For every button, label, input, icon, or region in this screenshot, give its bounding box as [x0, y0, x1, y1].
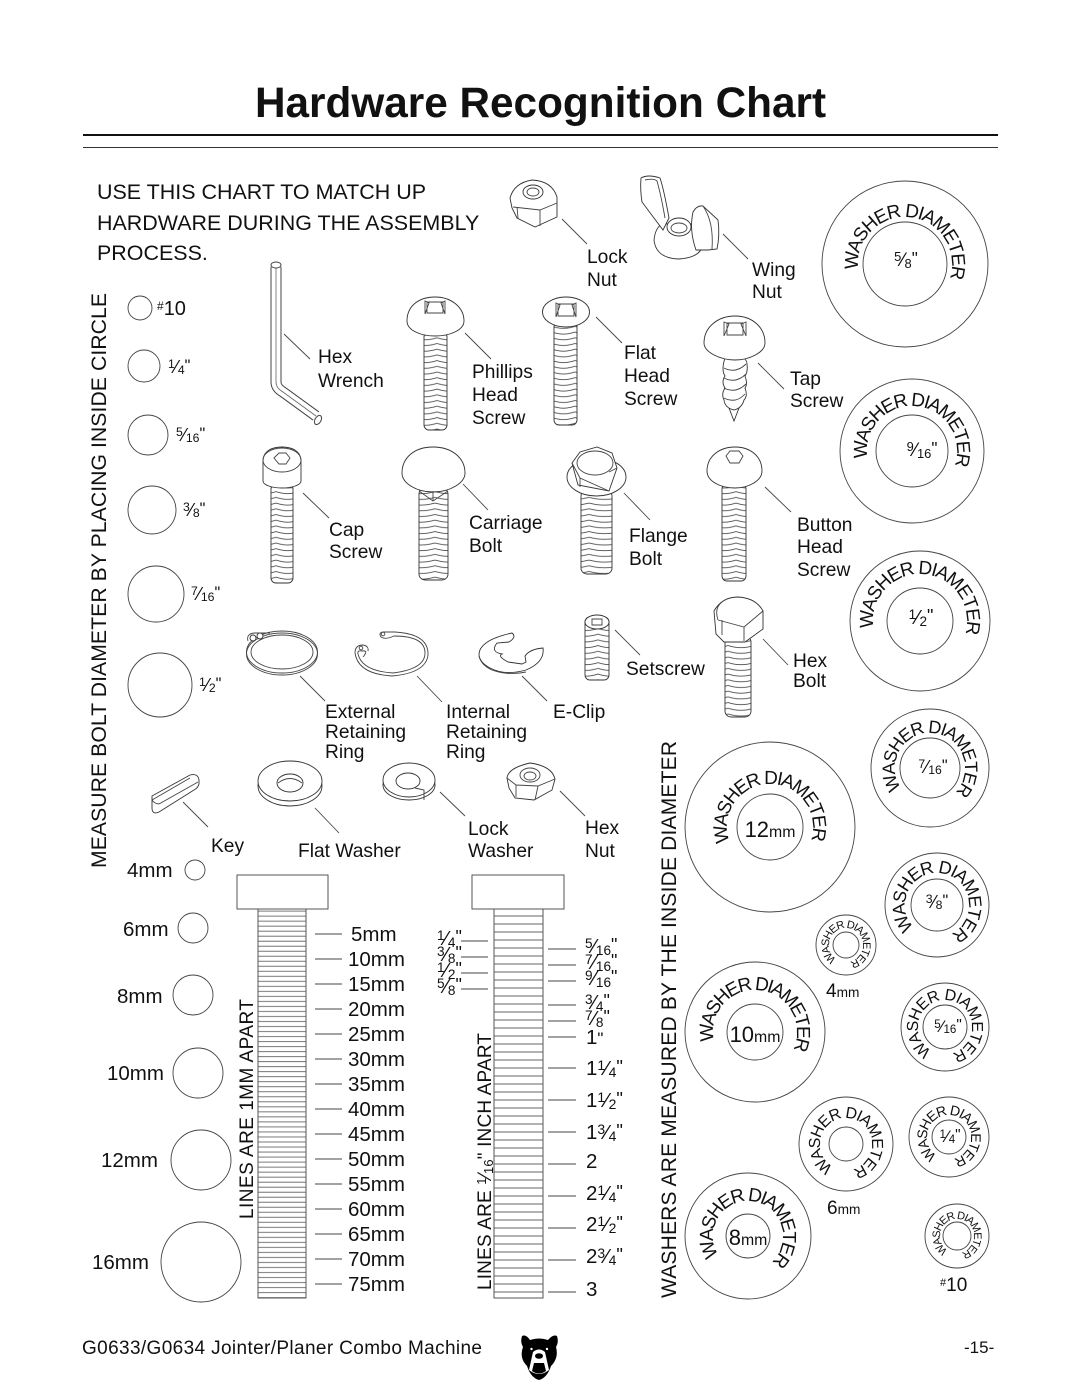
washer 5/8: WASHER DIAMETER	[844, 204, 966, 279]
e-clip	[479, 633, 605, 723]
footer: model name: G0633/G0634 Jointer/Planer Combo Machine	[82, 1338, 482, 1359]
leader line	[615, 630, 640, 655]
icon: cap screw	[263, 447, 301, 583]
left fraction labels: 1⁄2"	[437, 959, 462, 982]
phillips head screw	[407, 297, 533, 430]
label: Nut	[587, 270, 618, 291]
icon: lock nut	[510, 180, 557, 227]
label: Head	[624, 366, 670, 387]
washer 1/4: 1⁄4"	[939, 1127, 961, 1146]
washer 5/8	[822, 180, 988, 348]
bolt shank with 1mm lines	[258, 909, 306, 1298]
icon: key	[152, 775, 199, 813]
length labels: 75mm	[348, 1273, 405, 1296]
washer 1/2: WASHER DIAMETER	[860, 560, 980, 634]
length labels: 45mm	[348, 1123, 405, 1146]
right whole and mixed labels: 13⁄4"	[586, 1120, 623, 1144]
gauge 7/16: 7⁄16"	[191, 584, 220, 604]
label: Internal	[446, 702, 510, 723]
panel: metric bolt gauge circles	[92, 859, 241, 1302]
label: Key	[211, 836, 244, 857]
label: Flange	[629, 526, 688, 547]
leader line	[303, 493, 329, 518]
label: Phillips	[472, 362, 533, 383]
label: E-Clip	[553, 702, 605, 723]
gauge 1/2: 1⁄2"	[199, 675, 222, 695]
vertical label: LINES ARE 1⁄16" INCH APART	[474, 1033, 496, 1290]
washer 10mm: 10mm	[730, 1022, 780, 1047]
icon: hex bolt	[714, 597, 763, 717]
bolt shank with 1/16 inch lines	[494, 909, 543, 1298]
instructions text block: PROCESS.	[97, 241, 208, 265]
label: Bolt	[793, 671, 827, 692]
gauge 4mm	[127, 859, 205, 882]
label: Hex	[585, 818, 620, 839]
gauge 10mm: 10mm	[107, 1062, 164, 1085]
leader line	[522, 676, 547, 701]
instructions text block	[97, 180, 479, 265]
right fraction labels: 3⁄4"	[585, 991, 610, 1014]
label: Bolt	[469, 536, 503, 557]
leader line	[562, 219, 587, 244]
gauge 16mm	[92, 1222, 241, 1302]
label: Nut	[752, 282, 783, 303]
label	[325, 702, 406, 763]
length labels: 35mm	[348, 1073, 405, 1096]
label	[587, 247, 628, 291]
flange bolt	[567, 447, 688, 574]
tick marks	[461, 941, 576, 1292]
right whole and mixed labels: 11⁄4"	[586, 1056, 623, 1080]
right whole and mixed labels: 3	[586, 1278, 597, 1301]
washer 7/16: 7⁄16"	[918, 757, 948, 777]
label: Flat	[624, 343, 657, 364]
leader line	[758, 363, 784, 389]
length labels: 60mm	[348, 1198, 405, 1221]
right fraction labels: 7⁄8"	[585, 1007, 610, 1030]
icon: bear logo	[521, 1336, 558, 1380]
label	[329, 520, 382, 563]
label	[797, 515, 852, 581]
gauge 4mm: 4mm	[127, 859, 173, 882]
label	[318, 347, 384, 392]
icon: phillips screw	[407, 297, 464, 430]
washer 8mm	[684, 1172, 812, 1300]
icon: carriage bolt	[402, 447, 465, 580]
leader line	[440, 792, 465, 816]
left fraction labels: 3⁄8"	[437, 943, 462, 966]
washer 10mm: WASHER DIAMETER	[700, 976, 810, 1052]
cap screw	[263, 447, 382, 583]
length labels: 40mm	[348, 1098, 405, 1121]
length labels: 50mm	[348, 1148, 405, 1171]
button head screw	[707, 447, 852, 581]
panel: inch bolt gauge circles	[128, 296, 222, 717]
icon: flat head screw	[542, 297, 590, 425]
label	[624, 343, 677, 410]
hex wrench	[271, 262, 384, 426]
icon: hex wrench	[271, 262, 323, 426]
gauge 6mm: 6mm	[123, 918, 169, 941]
washer 6mm: 6mm	[827, 1198, 860, 1219]
label: Carriage	[469, 513, 543, 534]
label	[468, 819, 534, 862]
gauge 3/8	[128, 486, 206, 534]
label: Hex	[793, 651, 828, 672]
washer 5/16: 5⁄16"	[934, 1017, 962, 1036]
length labels: 55mm	[348, 1173, 405, 1196]
instructions text block: USE THIS CHART TO MATCH UP	[97, 180, 426, 204]
label	[585, 818, 620, 862]
gauge 5/16: 5⁄16"	[176, 425, 205, 445]
label: Head	[472, 385, 518, 406]
washer 5/8: 5⁄8"	[894, 249, 918, 271]
label: External	[325, 702, 395, 723]
washer 7/16	[870, 708, 990, 828]
instructions text block: HARDWARE DURING THE ASSEMBLY	[97, 211, 479, 235]
washer 9/16: 9⁄16"	[907, 439, 937, 461]
washer 8mm: WASHER DIAMETER	[700, 1188, 796, 1268]
leader line	[765, 487, 791, 512]
right whole and mixed labels	[586, 1026, 623, 1301]
right fraction labels	[585, 935, 617, 1030]
leader line	[560, 791, 585, 816]
vertical heading: washers: WASHERS ARE MEASURED BY THE INSIDE DIAMETER	[658, 741, 681, 1298]
gauge 3/8: 3⁄8"	[183, 500, 206, 520]
icon: tap screw	[704, 316, 765, 421]
label: Screw	[624, 389, 677, 410]
leader line	[463, 484, 488, 510]
label: Screw	[329, 542, 382, 563]
label	[472, 362, 533, 429]
washer #10: WASHER DIAMETER	[932, 1211, 982, 1258]
label: Lock	[468, 819, 509, 840]
length labels	[348, 923, 405, 1296]
washer 5/16: WASHER DIAMETER	[906, 988, 983, 1062]
washer 12mm: 12mm	[745, 817, 795, 842]
length labels: 65mm	[348, 1223, 405, 1246]
title: Hardware Recognition Chart	[255, 79, 826, 126]
label: Hex	[318, 347, 353, 368]
gauge 6mm	[123, 913, 208, 943]
label	[793, 651, 828, 692]
washer #10	[924, 1204, 990, 1296]
label	[629, 526, 688, 570]
external retaining ring	[246, 631, 406, 763]
icon: e-clip	[479, 633, 543, 674]
gauge 5/16	[128, 415, 205, 455]
washer 1/2: 1⁄2"	[909, 606, 933, 629]
gauge 7/16	[128, 566, 220, 622]
key	[152, 775, 244, 857]
panel: metric length bolt gauge	[237, 875, 405, 1298]
right whole and mixed labels: 1"	[586, 1026, 603, 1049]
label	[446, 702, 527, 763]
washer 10mm	[684, 962, 826, 1102]
label: Retaining	[325, 722, 406, 743]
label: Setscrew	[626, 659, 705, 680]
length labels: 25mm	[348, 1023, 405, 1046]
washer 6mm	[798, 1096, 894, 1219]
lock nut	[510, 180, 628, 291]
leader line	[465, 333, 491, 359]
icon: setscrew	[585, 615, 609, 680]
label: Washer	[468, 841, 534, 862]
washer 8mm: 8mm	[729, 1225, 767, 1250]
washer 4mm: 4mm	[826, 981, 859, 1002]
right whole and mixed labels: 21⁄2"	[586, 1212, 623, 1236]
washer 6mm: WASHER DIAMETER	[808, 1106, 884, 1178]
gauge 8mm: 8mm	[117, 985, 163, 1008]
tick marks	[315, 934, 342, 1284]
gauge 8mm	[117, 975, 213, 1015]
label: Screw	[472, 408, 525, 429]
right fraction labels: 7⁄16"	[585, 951, 617, 974]
washer 4mm	[816, 914, 876, 1002]
left fraction labels: 1⁄4"	[437, 927, 462, 950]
leader line	[417, 676, 442, 702]
right whole and mixed labels: 11⁄2"	[586, 1088, 623, 1112]
vertical heading: measure bolt diameter: MEASURE BOLT DIAMETER BY PLACING INSIDE CIRCLE	[88, 293, 111, 868]
length labels: 30mm	[348, 1048, 405, 1071]
wing nut	[641, 176, 796, 303]
label: Ring	[325, 742, 364, 763]
left fraction labels: 5⁄8"	[437, 975, 462, 998]
icon: flat washer	[258, 761, 322, 806]
label: Cap	[329, 520, 364, 541]
washer 3/8: WASHER DIAMETER	[892, 860, 982, 942]
label: Lock	[587, 247, 628, 268]
label: Wing	[752, 260, 796, 281]
gauge #10: #10	[157, 298, 186, 320]
length labels: 5mm	[351, 923, 397, 946]
footer: page number: -15-	[964, 1338, 994, 1357]
leader line	[284, 334, 310, 359]
leader line	[723, 234, 748, 259]
washer 3/8: 3⁄8"	[926, 892, 948, 912]
icon: wing nut	[641, 176, 719, 259]
washer 1/4: WASHER DIAMETER	[917, 1105, 981, 1166]
leader line	[300, 676, 325, 701]
right whole and mixed labels: 23⁄4"	[586, 1244, 623, 1268]
washer 9/16: WASHER DIAMETER	[854, 392, 970, 466]
internal retaining ring	[355, 632, 527, 763]
lock washer	[383, 763, 534, 862]
setscrew	[585, 615, 705, 680]
label: Screw	[790, 391, 843, 412]
hex bolt	[714, 597, 828, 717]
icon: button head screw	[707, 447, 762, 581]
label: Button	[797, 515, 852, 536]
gauge 16mm: 16mm	[92, 1251, 149, 1274]
gauge #10	[128, 296, 186, 320]
label	[752, 260, 796, 303]
panel: inch length bolt gauge	[437, 875, 623, 1301]
bolt head	[472, 875, 564, 909]
washer 7/16: WASHER DIAMETER	[882, 720, 978, 797]
washer #10: #10	[940, 1275, 967, 1296]
label: Wrench	[318, 371, 384, 392]
label: Ring	[446, 742, 485, 763]
right fraction labels: 5⁄16"	[585, 935, 617, 958]
label: Retaining	[446, 722, 527, 743]
leader line	[596, 317, 622, 343]
right whole and mixed labels: 2	[586, 1150, 597, 1173]
bolt head	[237, 875, 328, 909]
gauge 12mm: 12mm	[101, 1149, 158, 1172]
label	[790, 369, 843, 412]
icon: flange bolt	[567, 447, 626, 574]
icon: lock washer	[383, 763, 435, 800]
label: Tap	[790, 369, 821, 390]
right whole and mixed labels: 21⁄4"	[586, 1181, 623, 1205]
icon: external ring	[246, 631, 318, 675]
length labels: 20mm	[348, 998, 405, 1021]
flat washer	[258, 761, 401, 862]
gauge 10mm	[107, 1048, 223, 1098]
leader line	[183, 802, 208, 827]
icon: hex nut	[507, 763, 555, 800]
leader line	[315, 808, 339, 833]
label: Screw	[797, 560, 850, 581]
label: Nut	[585, 841, 616, 862]
gauge 1/4	[128, 350, 191, 382]
tap screw	[704, 316, 843, 421]
label: Flat Washer	[298, 841, 401, 862]
left fraction labels	[437, 927, 462, 998]
right fraction labels: 9⁄16"	[585, 967, 617, 990]
icon: internal ring	[355, 632, 428, 676]
carriage bolt	[402, 447, 543, 580]
label: Head	[797, 537, 843, 558]
gauge 1/4: 1⁄4"	[168, 357, 191, 377]
panel: washer gauges	[684, 180, 990, 1300]
gauge 1/2	[128, 653, 222, 717]
label: Bolt	[629, 549, 663, 570]
label	[469, 513, 543, 557]
washer 12mm: WASHER DIAMETER	[713, 770, 826, 844]
length labels: 15mm	[348, 973, 405, 996]
length labels: 70mm	[348, 1248, 405, 1271]
gauge 12mm	[101, 1130, 231, 1190]
vertical label: LINES ARE 1MM APART	[237, 999, 258, 1219]
leader line	[624, 493, 650, 520]
washer 4mm: WASHER DIAMETER	[822, 920, 871, 968]
length labels: 10mm	[348, 948, 405, 971]
title rules	[83, 134, 998, 148]
washer 9/16	[840, 378, 984, 524]
leader line	[763, 639, 788, 665]
washer 12mm	[684, 742, 856, 912]
hex nut	[507, 763, 620, 862]
washer 1/2	[850, 550, 990, 692]
flat head screw	[542, 297, 677, 425]
